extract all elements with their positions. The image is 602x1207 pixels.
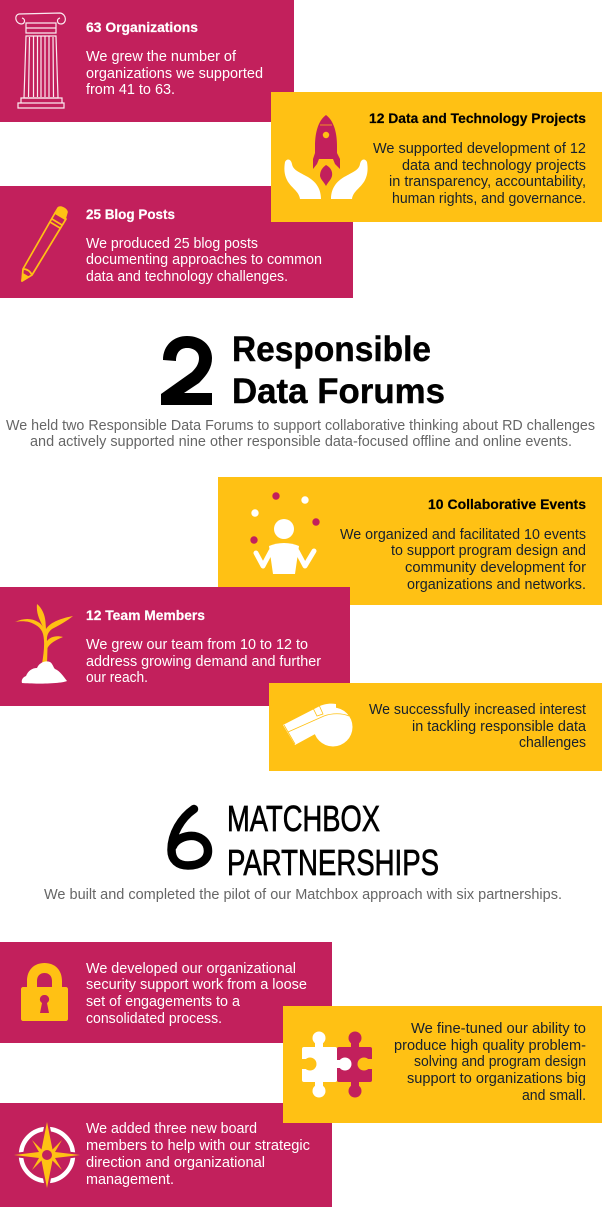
panel: 25 blog posts <box>0 186 353 298</box>
text: 12 team members: address growing demand and further <box>86 654 321 670</box>
text: board members <box>86 1121 310 1188</box>
icon: compass rose <box>14 1122 80 1188</box>
icon: rocket in hands <box>284 115 368 199</box>
text: 63 organizations: from 41 to 63. <box>86 82 175 98</box>
icon: padlock <box>21 963 68 1021</box>
text: 25 blog posts: We produced 25 blog posts <box>86 236 258 252</box>
text: organizational security <box>86 961 307 1027</box>
text: 12 team members <box>86 607 321 686</box>
text: problem solving: solving and program design <box>414 1054 586 1070</box>
text: board members: members to help with our strategic <box>86 1138 310 1154</box>
text: 12 data and technology projects: data and technology projects <box>402 158 586 174</box>
numeral 6 <box>172 809 208 866</box>
icon: puzzle pieces <box>301 1032 373 1098</box>
text: problem solving: support to organizations big <box>407 1071 586 1087</box>
panel: 10 collaborative events <box>218 477 602 605</box>
heading: 6 matchbox partnerships: PARTNERSHIPS <box>227 842 439 883</box>
panel: increased interest <box>269 683 602 771</box>
panel: 12 team members <box>0 587 350 706</box>
text: organizational security: consolidated process. <box>86 1011 222 1027</box>
text: forums description: and actively supported nine other responsible data-focused offline and online events. <box>30 434 572 450</box>
text: 25 blog posts: 25 Blog Posts <box>86 206 175 222</box>
text: board members: management. <box>86 1172 174 1188</box>
text: 10 collaborative events: to support program design and <box>391 543 586 559</box>
text: 10 collaborative events: 10 Collaborative Events <box>428 496 586 512</box>
text: increased interest: We successfully increased interest <box>369 702 586 718</box>
text: board members: direction and organizational <box>86 1155 265 1171</box>
text: board members: We added three new board <box>86 1121 257 1137</box>
text: 12 team members: We grew our team from 10 to 12 to <box>86 637 308 653</box>
text: 10 collaborative events: We organized and facilitated 10 events <box>340 527 586 543</box>
text: 10 collaborative events <box>340 496 586 593</box>
text: 63 organizations: 63 Organizations <box>86 19 198 35</box>
panel: 12 data and technology projects <box>271 92 602 222</box>
text: organizational security: We developed our organizational <box>86 961 296 977</box>
text: 63 organizations: We grew the number of <box>86 49 237 65</box>
text: 63 organizations: organizations we supported <box>86 66 263 82</box>
panel: board members <box>0 1103 332 1207</box>
icon: whistle <box>283 704 352 746</box>
text: problem solving: and small. <box>522 1088 586 1104</box>
heading: 2 responsible data forums: Responsible <box>232 330 431 369</box>
text: 12 data and technology projects: human rights, and governance. <box>392 191 586 207</box>
text: forums description: We held two Responsible Data Forums to support collaborative thinking about RD challenges <box>6 418 595 434</box>
panel: 63 organizations <box>0 0 294 122</box>
text: 12 data and technology projects <box>369 110 586 207</box>
text: problem solving: produce high quality problem- <box>394 1038 586 1054</box>
icon: pencil <box>22 207 67 281</box>
numeral 2 <box>161 336 212 405</box>
text: 12 team members: our reach. <box>86 670 148 686</box>
panel: organizational security <box>0 942 332 1043</box>
heading: 2 responsible data forums: Data Forums <box>232 372 445 411</box>
text: forums description <box>6 418 595 450</box>
text: 25 blog posts <box>86 206 322 285</box>
text: 12 data and technology projects: We supported development of 12 <box>373 141 586 157</box>
text: 25 blog posts: data and technology challenges. <box>86 269 288 285</box>
text: increased interest: in tackling responsible data <box>412 719 587 735</box>
text: 12 team members: 12 Team Members <box>86 607 205 623</box>
text: increased interest: challenges <box>519 735 586 751</box>
heading: 2 responsible data forums <box>161 330 445 411</box>
text: 25 blog posts: documenting approaches to common <box>86 252 322 268</box>
text: problem solving: We fine-tuned our ability to <box>411 1021 586 1037</box>
text: organizational security: set of engagements to a <box>86 994 241 1010</box>
heading: 6 matchbox partnerships: MATCHBOX <box>227 798 380 839</box>
text: problem solving <box>394 1021 586 1104</box>
text: increased interest <box>369 702 587 751</box>
text: organizational security: security support work from a loose <box>86 977 307 993</box>
text: matchbox description: We built and completed the pilot of our Matchbox approach with six partnerships. <box>44 887 562 903</box>
text: 10 collaborative events: organizations and networks. <box>407 577 586 593</box>
text: 12 data and technology projects: 12 Data and Technology Projects <box>369 110 586 126</box>
icon: juggler <box>250 492 320 574</box>
icon: ionic column <box>16 13 65 108</box>
icon: sprout <box>15 604 73 684</box>
text: 10 collaborative events: community development for <box>405 560 586 576</box>
heading: 6 matchbox partnerships <box>172 798 439 883</box>
text: 63 organizations <box>86 19 263 98</box>
panel: problem solving <box>283 1006 602 1123</box>
text: 12 data and technology projects: in transparency, accountability, <box>389 174 586 190</box>
